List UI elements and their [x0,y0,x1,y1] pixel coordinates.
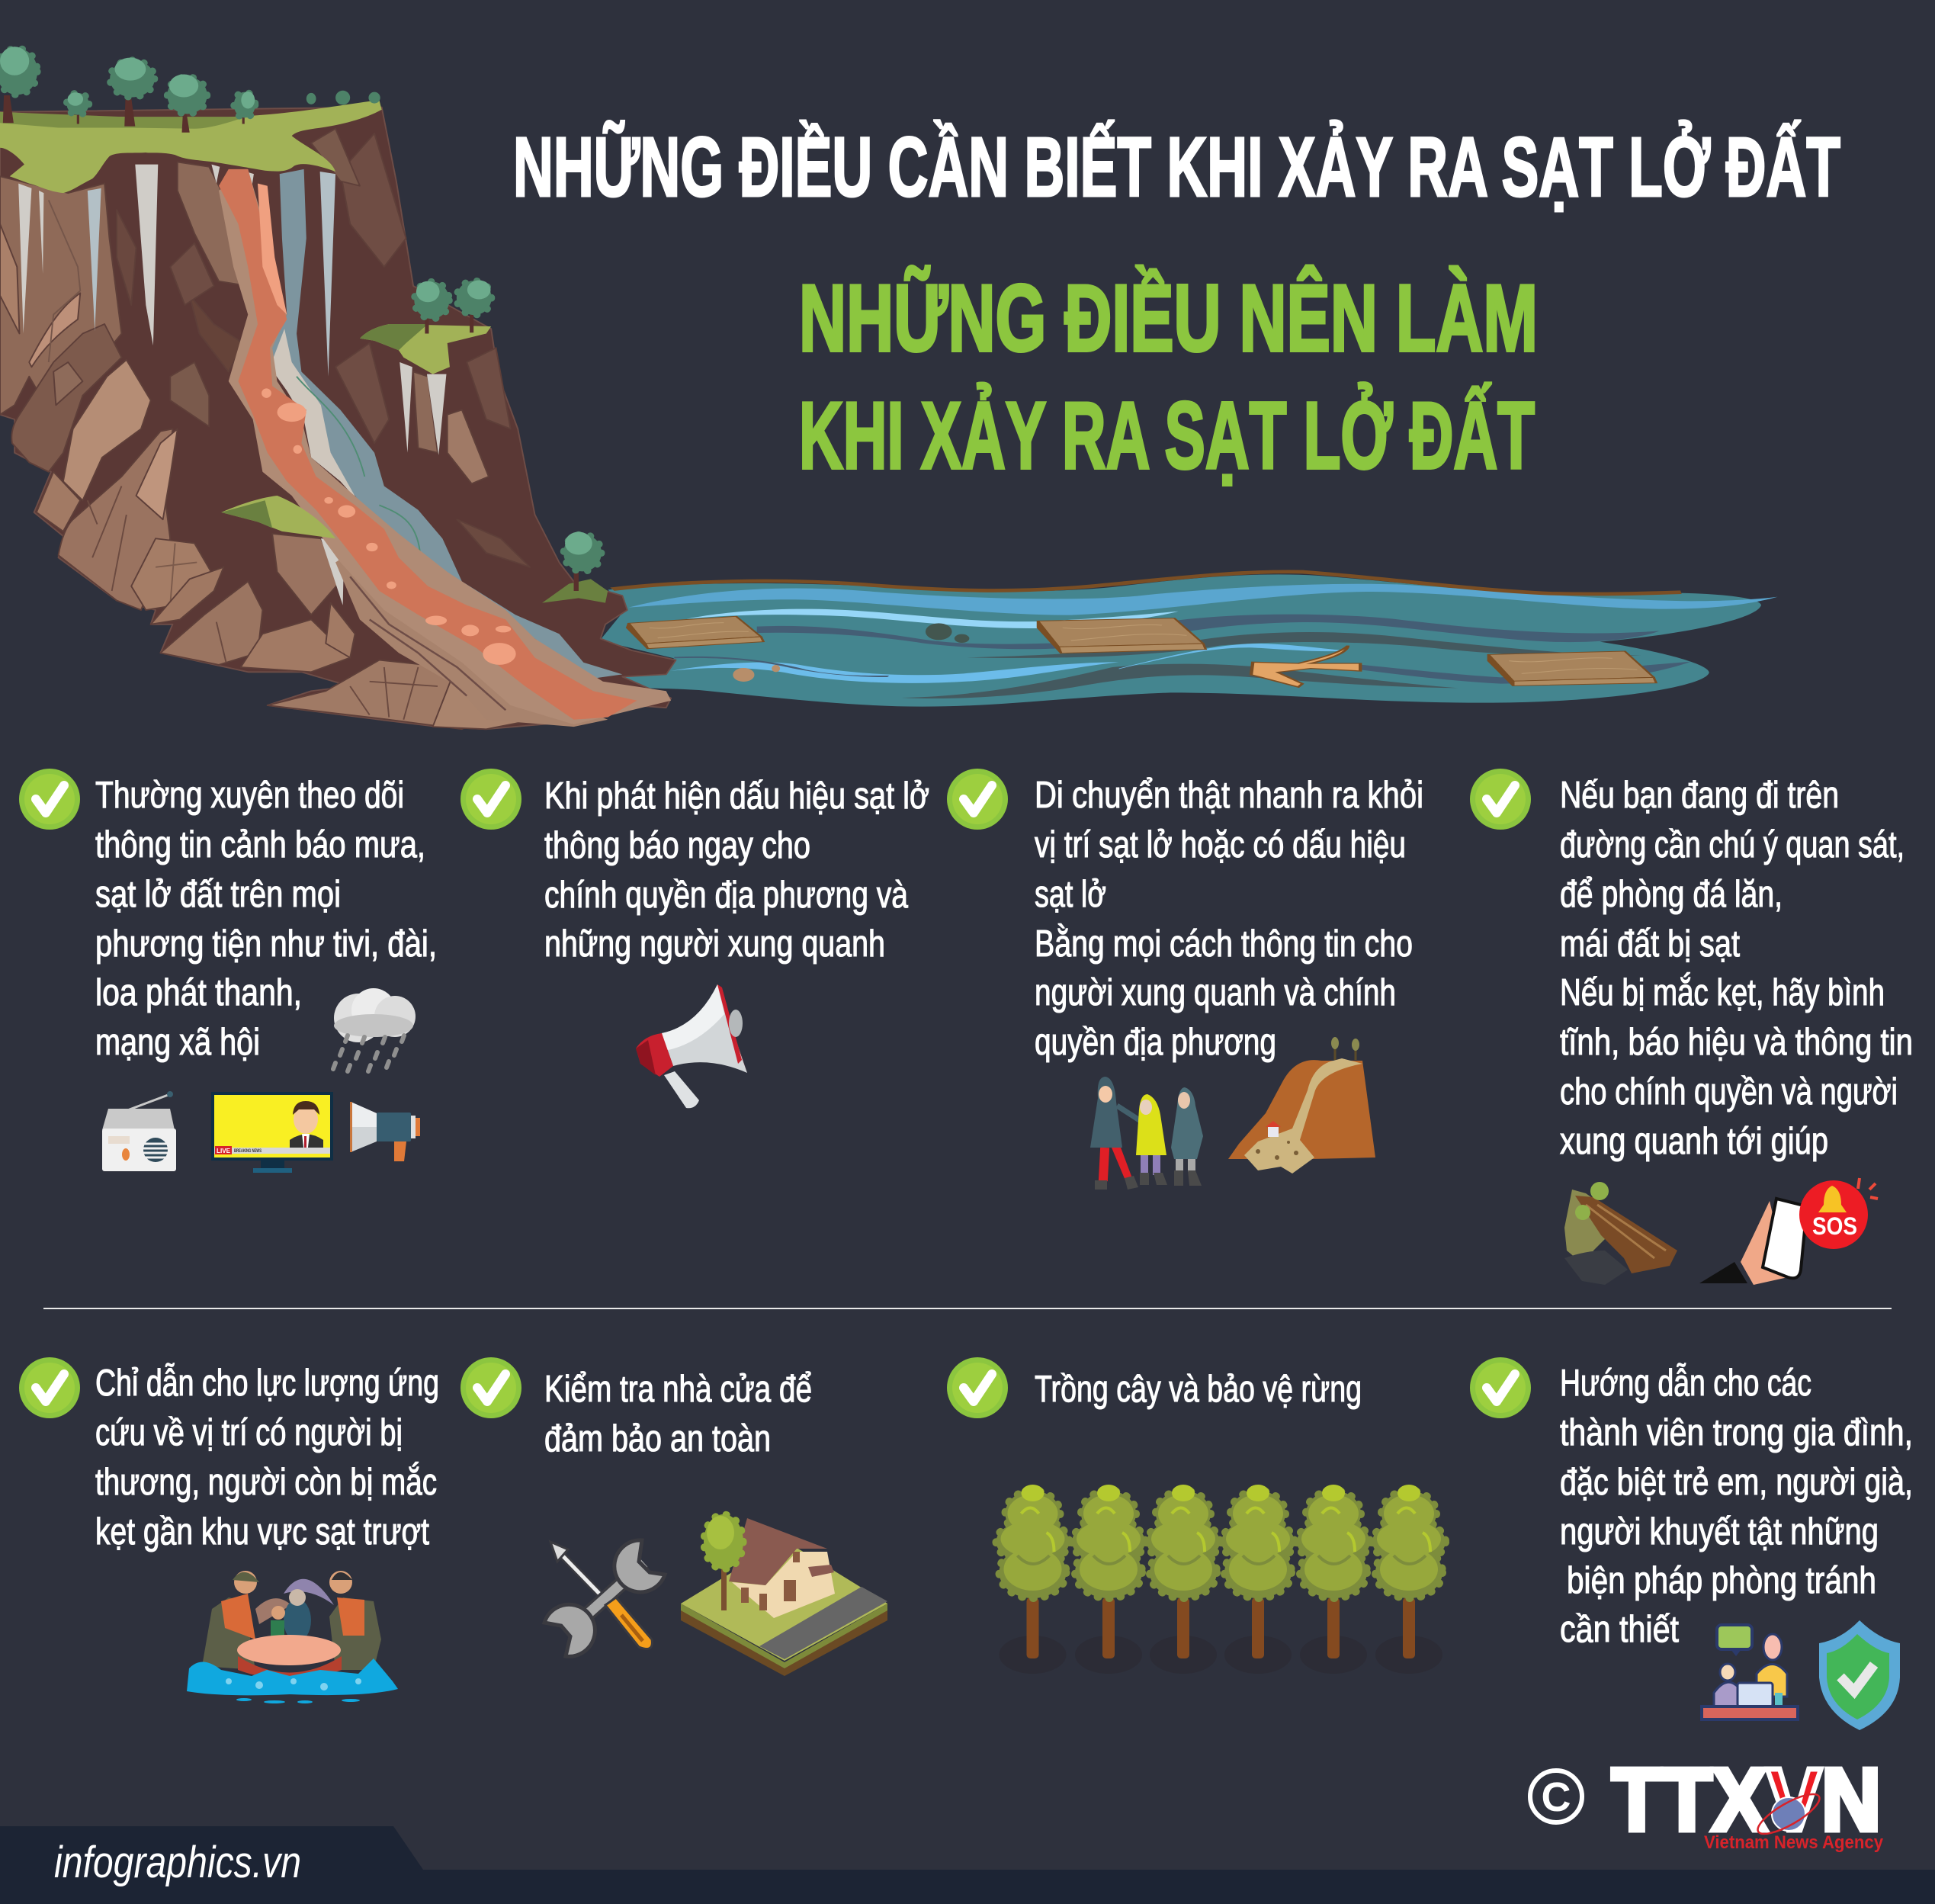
illustration: cliff with mudslide [0,47,675,729]
grass lower [221,496,335,538]
check icon 8 [1470,1357,1531,1418]
icon: shield [1819,1620,1900,1730]
text 1: Thường xuyên theo dõi [95,775,404,816]
icon: red megaphone [636,984,747,1108]
icon: rescue boat [187,1571,398,1703]
check icon 7 [947,1357,1008,1418]
text 5: Chỉ dẫn cho lực lượng ứng [95,1363,439,1404]
icon: wrench and screwdriver [544,1540,665,1656]
cliff trees [0,47,602,591]
text 6 [544,1369,812,1459]
text 3: người xung quanh và chính [1035,972,1396,1013]
check icon 3 [947,769,1008,830]
copyright mark [1530,1771,1582,1822]
text 2: thông báo ngay cho [544,825,810,866]
text 4 [1560,775,1913,1162]
text 6: Kiểm tra nhà cửa để [544,1369,812,1410]
text 8: cần thiết [1560,1609,1679,1650]
green heading: KHI XẢY RA SẠT LỞ ĐẤT [799,383,1535,489]
text 8: biện pháp phòng tránh [1567,1560,1876,1601]
mudslide [335,553,608,727]
icon: rain cloud [333,988,416,1071]
text 1 [95,775,437,1063]
icon: house with tree [681,1514,887,1676]
text 3 [1035,775,1423,1063]
text 3: Di chuyển thật nhanh ra khỏi [1035,775,1423,816]
grass ledge [360,324,491,374]
icon: people evacuating [1090,1077,1203,1190]
plank 2 [1038,618,1205,653]
check icon 4 [1470,769,1531,830]
icon: phone sos: SOS [1812,1212,1857,1240]
text 8 [1560,1363,1913,1650]
trees row [996,1485,1446,1674]
text 6: đảm bảo an toàn [544,1418,771,1459]
grass top [0,100,382,193]
icon: tv news: BREAKING NEWS [234,1149,262,1154]
icon: loudspeaker [350,1102,420,1161]
icon: small landslide [1228,1037,1375,1174]
text 3: vị trí sạt lở hoặc có dấu hiệu [1035,824,1406,865]
plank 1 [627,616,763,649]
floating branch [1251,646,1360,687]
text 1: mạng xã hội [95,1022,260,1063]
check icon 5 [19,1357,80,1418]
text 1: loa phát thanh, [95,972,302,1013]
icon: radio [102,1091,176,1171]
text 5: cứu về vị trí có người bị [95,1412,403,1453]
check icon 6 [460,1357,521,1418]
icicles [18,165,446,605]
text 7: Trồng cây và bảo vệ rừng [1035,1369,1362,1410]
text 4: xung quanh tới giúp [1560,1121,1828,1162]
TTXVN logo: Vietnam News Agency [1704,1832,1884,1853]
text 2 [544,775,929,965]
icon: tv news: LIVE [217,1148,231,1154]
text 3: Bằng mọi cách thông tin cho [1035,923,1413,965]
icon: tv news [213,1093,332,1173]
green heading: NHỮNG ĐIỀU NÊN LÀM [799,265,1538,371]
text 1: thông tin cảnh báo mưa, [95,824,425,865]
check icon 1 [19,769,80,830]
text 1: phương tiện như tivi, đài, [95,923,437,965]
text 4: Nếu bạn đang đi trên [1560,775,1839,816]
text 2: chính quyền địa phương và [544,875,909,916]
TTXVN logo: TTXVN [1612,1750,1881,1849]
footer band [0,1826,1935,1904]
green heading [799,265,1538,489]
copyright mark: C [1542,1774,1571,1820]
text 3: sạt lở [1035,874,1106,915]
text 5: thương, người còn bị mắc [95,1462,437,1503]
text 8: Hướng dẫn cho các [1560,1363,1811,1404]
icon: family discussing [1702,1625,1798,1719]
footer site name: infographics.vn [54,1838,301,1887]
divider [43,1308,1892,1309]
check icon 2 [460,769,521,830]
text 1: sạt lở đất trên mọi [95,874,341,915]
text 5: kẹt gần khu vực sạt trượt [95,1511,429,1552]
icon: phone sos [1699,1178,1878,1285]
text 3: quyền địa phương [1035,1022,1276,1063]
plank 3 [1488,651,1656,686]
illustration: river [592,572,1778,707]
text 4: để phòng đá lăn, [1560,874,1783,915]
text 5 [95,1363,439,1552]
rock facets [0,129,535,729]
text 2: Khi phát hiện dấu hiệu sạt lở [544,775,929,817]
text 2: những người xung quanh [544,923,885,965]
water stream [270,169,622,679]
icon: road landslide [1564,1182,1677,1285]
text 4: mái đất bị sạt [1560,923,1740,965]
